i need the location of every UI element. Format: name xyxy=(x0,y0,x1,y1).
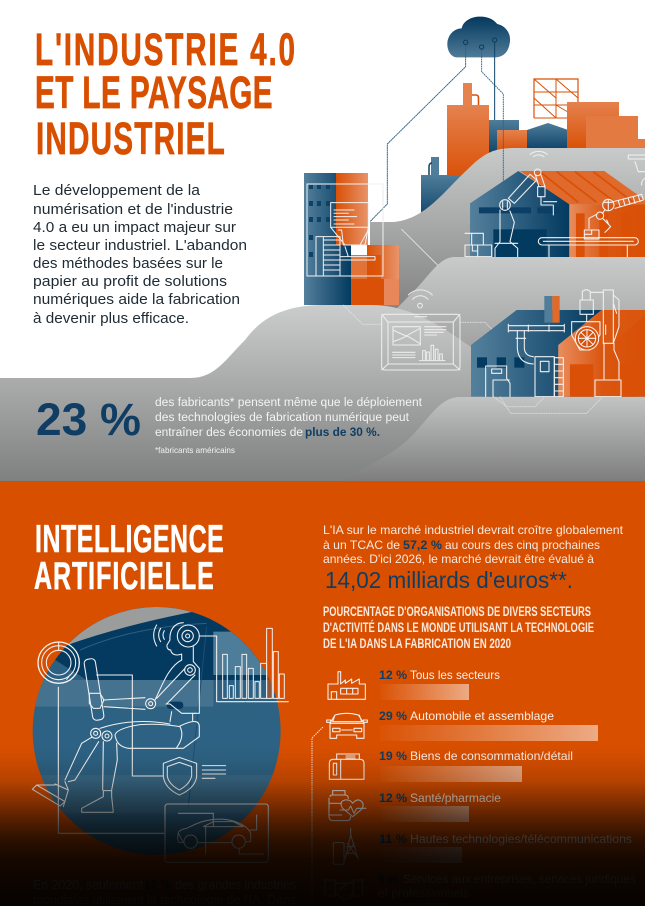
panel: intelligence artificielle background xyxy=(0,481,645,906)
stat: 14,02 milliards d'euros: 14,02 milliards d'euros**. xyxy=(325,567,573,593)
row: services: 9 % xyxy=(378,872,398,886)
row: automobile xyxy=(312,709,598,906)
row: tous les secteurs xyxy=(328,668,500,700)
text block: market forecast: à un TCAC de xyxy=(323,538,400,552)
row: santé xyxy=(329,791,501,822)
title: ET LE PAYSAGE xyxy=(35,68,273,119)
heading: intelligence artificielle xyxy=(34,516,224,597)
text block: market forecast: au cours des cinq prochaines xyxy=(445,538,600,552)
row: automobile: Automobile et assemblage xyxy=(410,709,554,723)
text block: market forecast xyxy=(323,523,624,566)
row: santé: Santé/pharmacie xyxy=(410,791,501,805)
hill: middle xyxy=(370,257,645,481)
heading: intelligence artificielle: INTELLIGENCE xyxy=(35,516,224,560)
heading: chart title xyxy=(323,604,594,651)
illustration: background factory skyline xyxy=(421,79,645,219)
text block: stat description: des technologies de fabrication numérique peut xyxy=(155,412,410,424)
text block: intro: à devenir plus efficace. xyxy=(33,311,189,327)
hill: lower right xyxy=(340,397,645,481)
row: santé: 12 % xyxy=(379,791,407,805)
dotted connectors below lower factory xyxy=(493,397,603,413)
text block: bottom paragraph: des grandes industries xyxy=(175,878,296,892)
heading: chart title: DE L'IA DANS LA FABRICATION EN 2020 xyxy=(323,636,511,651)
bar chart: sectors xyxy=(312,668,636,906)
text block: market forecast: L'IA sur le marché industriel devrait croître globalement xyxy=(323,523,624,537)
text block: stat description: entraîner des économies de xyxy=(155,427,303,439)
row: services: et professionnels xyxy=(378,886,469,900)
row: automobile: 29 % xyxy=(379,709,407,723)
heading: intelligence artificielle: ARTIFICIELLE xyxy=(34,553,214,597)
stat: 23 %: 23 % xyxy=(36,394,141,445)
text block: intro: numériques aide la fabrication xyxy=(33,292,240,308)
title: L'INDUSTRIE 4.0 xyxy=(35,25,295,76)
text block: intro: Le développement de la xyxy=(33,183,201,199)
illustration: upper factory with robot arms xyxy=(465,151,645,260)
text block: bottom paragraph xyxy=(33,878,296,906)
hill: left foreground xyxy=(0,305,500,481)
text block: market forecast: années. D'ici 2026, le marché devrait être évalué à xyxy=(323,552,594,566)
panel: industrie 4.0 background xyxy=(0,0,645,481)
text block: intro: le secteur industriel. L'abandon xyxy=(33,238,247,254)
row: hautes technologies xyxy=(333,828,632,864)
text block: intro: papier au profit de solutions xyxy=(33,274,227,290)
text block: stat description xyxy=(155,397,423,455)
bottom fade overlay xyxy=(0,745,645,906)
row: biens de consommation xyxy=(329,749,573,782)
row: biens de consommation: Biens de consommation/détail xyxy=(410,749,573,763)
icon: tablet dashboard with wifi xyxy=(382,290,460,370)
icon: cloud with circuit lines xyxy=(370,17,510,222)
row: services: Services aux entreprises, services juridiques xyxy=(403,872,636,886)
connector lines around tablet xyxy=(343,305,497,367)
row: tous les secteurs: 12 % xyxy=(379,668,407,682)
illustration: crash test dummy in blue circle xyxy=(30,597,288,862)
text block: intro xyxy=(33,183,247,327)
text block: stat description: plus de 30 %. xyxy=(305,427,380,439)
text block: bottom paragraph: 12 % xyxy=(144,878,171,892)
title: INDUSTRIEL xyxy=(36,114,225,165)
row: services xyxy=(325,872,636,906)
row: hautes technologies: 11 % xyxy=(379,832,407,846)
title xyxy=(35,25,295,165)
text block: market forecast: 57,2 % xyxy=(403,538,442,552)
illustration: left building with silo and server xyxy=(304,173,523,308)
text block: intro: 4.0 a eu un impact majeur sur xyxy=(33,220,236,236)
illustration: lower factory with pipes and turbine xyxy=(471,290,645,397)
text block: intro: des méthodes basées sur le xyxy=(33,256,223,272)
text block: bottom paragraph: En 2020, seulement xyxy=(33,878,144,892)
row: tous les secteurs: Tous les secteurs xyxy=(410,668,500,682)
hill: back xyxy=(370,148,645,481)
text block: intro: numérisation et de l'industrie xyxy=(33,202,233,218)
text block: stat description: *fabricants américains xyxy=(155,445,235,455)
row: hautes technologies: Hautes technologies/télécommunications xyxy=(410,832,632,846)
text block: stat description: des fabricants* pensent même que le déploiement xyxy=(155,397,423,409)
row: biens de consommation: 19 % xyxy=(379,749,407,763)
